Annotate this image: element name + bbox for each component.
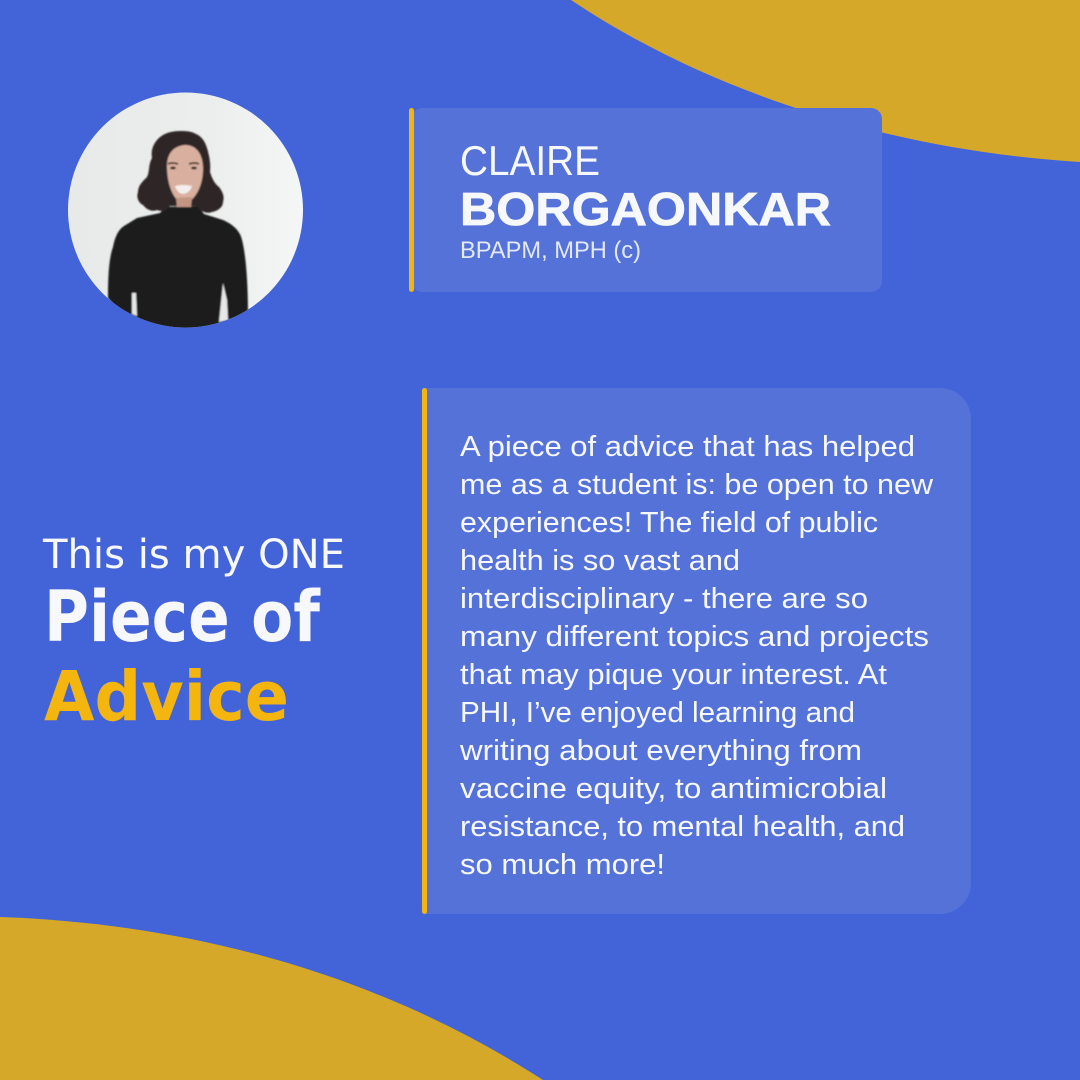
heading line 3: Advice	[44, 657, 289, 737]
advice text: resistance, to mental health, and	[460, 811, 905, 843]
name card accent bar	[409, 108, 414, 292]
portrait photo	[68, 92, 303, 330]
advice text: writing about everything from	[459, 735, 862, 767]
advice text	[459, 431, 934, 881]
advice text: PHI, I’ve enjoyed learning and	[460, 697, 855, 729]
face	[167, 145, 203, 203]
name card	[409, 108, 882, 292]
advice text: that may pique your interest. At	[460, 659, 887, 691]
heading line 2: Piece of	[44, 576, 321, 658]
credentials: BPAPM, MPH (c)	[460, 237, 641, 264]
advice text: vaccine equity, to antimicrobial	[460, 773, 887, 805]
advice panel accent bar	[422, 388, 427, 914]
decorative gold wave: bottom left	[0, 917, 543, 1080]
advice text: many different topics and projects	[460, 621, 929, 653]
heading	[42, 532, 345, 737]
hair	[137, 131, 224, 213]
advice text: so much more!	[460, 849, 665, 881]
advice text: interdisciplinary - there are so	[460, 583, 868, 615]
advice text: A piece of advice that has helped	[460, 431, 915, 463]
heading line 1: This is my ONE	[42, 532, 345, 578]
last name: BORGAONKAR	[460, 183, 831, 235]
advice text: experiences! The field of public	[460, 507, 878, 539]
advice panel	[422, 388, 971, 914]
decorative gold wave: top right	[571, 0, 1080, 162]
first name: CLAIRE	[460, 137, 600, 184]
sweater	[108, 206, 248, 330]
advice text: me as a student is: be open to new	[460, 469, 934, 501]
advice text: health is so vast and	[460, 545, 740, 577]
